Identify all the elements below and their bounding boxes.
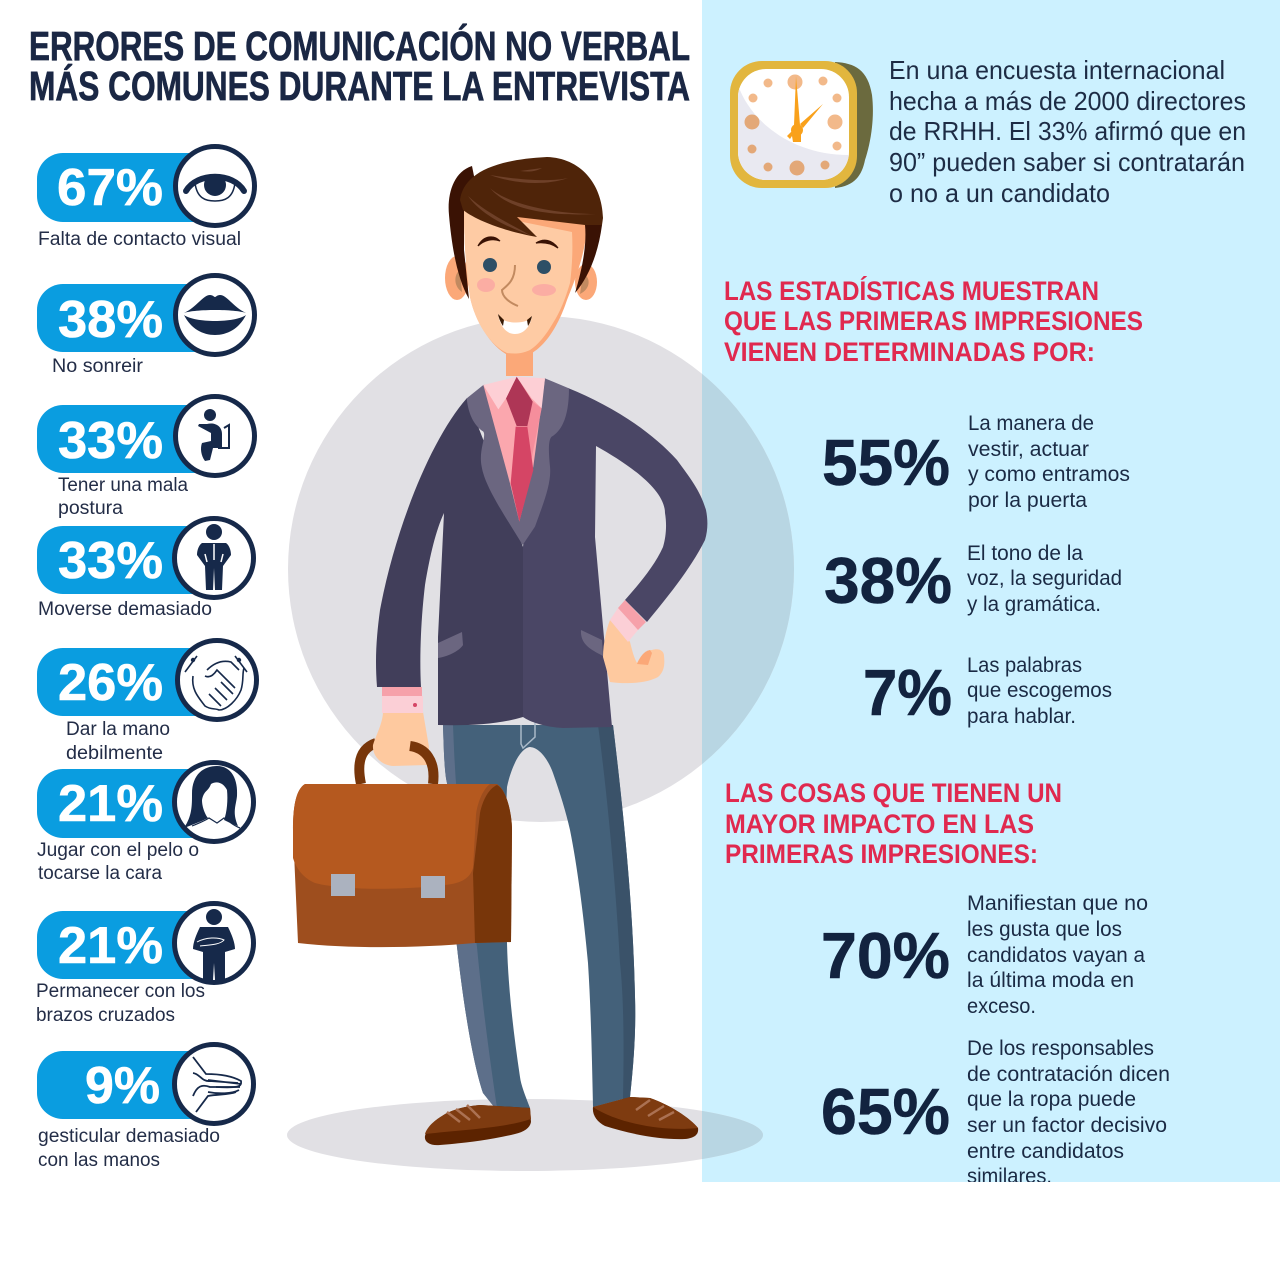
stat: 21% jugar con el pelo: 21% [58, 775, 163, 833]
intro text: de RRHH. El 33% afirmó que en [889, 116, 1246, 146]
stat: 70%: Manifiestan que no [967, 891, 1148, 915]
heading: mayor impacto: MAYOR IMPACTO EN LAS [725, 809, 1034, 839]
heading: primeras impresiones: LAS ESTADÍSTICAS MUESTRAN [724, 276, 1099, 306]
stat: 9% gesticular demasiado: gesticular demasiado [38, 1126, 220, 1147]
stat: 21% brazos cruzados: Permanecer con los [36, 981, 205, 1002]
stat: 70% [821, 891, 1148, 1018]
stat: 21% jugar con el pelo [37, 762, 254, 884]
stat: 26% dar la mano debilmente: debilmente [66, 743, 163, 764]
stat: 21% jugar con el pelo: tocarse la cara [38, 863, 162, 884]
heading: mayor impacto: LAS COSAS QUE TIENEN UN [725, 778, 1062, 808]
stat: 38% no sonreir: 38% [58, 291, 163, 349]
stat: 65%: ser un factor decisivo [967, 1113, 1167, 1137]
icon: seated person [176, 396, 254, 476]
stat: 33% moverse demasiado [37, 518, 254, 620]
stat: 67% falta de contacto visual: 67% [57, 159, 163, 217]
stat: 70%: la última moda en [967, 968, 1134, 992]
stat: 55% [822, 411, 1130, 512]
stat: 9% gesticular demasiado: con las manos [38, 1150, 160, 1171]
stat: 67% falta de contacto visual [37, 146, 254, 250]
stat: 65%: de contratación dicen [967, 1062, 1170, 1086]
stat: 55%: y como entramos [968, 462, 1130, 486]
stat: 33% mala postura [37, 396, 254, 519]
stat: 33% moverse demasiado: Moverse demasiado [38, 599, 212, 620]
icon: eye [176, 146, 254, 226]
panel: right blue background [702, 0, 1280, 1182]
stat: 55%: La manera de [968, 411, 1094, 435]
intro text [889, 55, 1246, 208]
stat: 38% no sonreir [37, 276, 254, 377]
hair [449, 157, 603, 299]
right shoe [593, 1097, 698, 1139]
icon: gesturing hand [174, 1044, 254, 1124]
stat: 65%: que la ropa puede [967, 1087, 1136, 1111]
jacket [376, 388, 707, 728]
stat: 26% dar la mano debilmente: Dar la mano [66, 719, 170, 740]
stat: 55%: vestir, actuar [968, 437, 1089, 461]
stat: 7% [863, 653, 1112, 729]
intro text: 90” pueden saber si contratarán [889, 147, 1245, 177]
stat: 38%: y la gramática. [967, 592, 1101, 616]
stat: 65%: similares. [967, 1164, 1052, 1188]
stat: 70%: les gusta que los [967, 917, 1122, 941]
stat: 21% brazos cruzados [36, 904, 254, 1026]
left shoe [425, 1105, 531, 1145]
left hand and cuff [373, 687, 433, 784]
neck and ears [445, 256, 597, 376]
stat: 70%: candidatos vayan a [967, 943, 1145, 967]
icon: person with crossed arms [174, 904, 254, 982]
stat: 67% falta de contacto visual: Falta de contacto visual [38, 229, 241, 250]
illustration: businessman with briefcase [293, 157, 707, 1145]
title: ERRORES DE COMUNICACIÓN NO VERBAL [29, 23, 690, 69]
intro text: En una encuesta internacional [889, 55, 1225, 85]
title: MÁS COMUNES DURANTE LA ENTREVISTA [29, 63, 690, 109]
stat: 33% moverse demasiado: 33% [58, 532, 163, 590]
stat: 65%: entre candidatos [967, 1139, 1124, 1163]
stat: 26% dar la mano debilmente [37, 640, 256, 764]
stat: 65%: 65% [821, 1075, 950, 1148]
stat: 9% gesticular demasiado [37, 1044, 254, 1171]
stat: 38% [824, 541, 1122, 617]
heading: primeras impresiones [724, 276, 1143, 367]
face [464, 210, 587, 358]
stat: 26% dar la mano debilmente: 26% [58, 654, 163, 712]
briefcase [293, 784, 512, 947]
icon: handshake [178, 640, 256, 720]
stat: 70%: 70% [821, 919, 950, 992]
stat: 55%: 55% [822, 426, 950, 499]
heading: mayor impacto [725, 778, 1062, 869]
icon: standing man [174, 518, 254, 598]
stat: 7%: 7% [863, 656, 952, 729]
stat: 38%: El tono de la [967, 541, 1083, 565]
stat: 55%: por la puerta [968, 488, 1087, 512]
title [29, 23, 690, 109]
intro text: hecha a más de 2000 directores [889, 86, 1246, 116]
stat: 70%: exceso. [967, 994, 1036, 1018]
left handle part [359, 743, 376, 784]
right hand and cuff [603, 600, 664, 683]
stat: 33% mala postura: Tener una mala [58, 475, 188, 496]
stat: 7%: Las palabras [967, 653, 1082, 677]
heading: primeras impresiones: VIENEN DETERMINADAS POR: [724, 337, 1095, 367]
trousers [443, 712, 635, 1108]
stat: 21% brazos cruzados: 21% [58, 917, 163, 975]
stat: 21% brazos cruzados: brazos cruzados [36, 1005, 175, 1026]
heading: primeras impresiones: QUE LAS PRIMERAS IMPRESIONES [724, 306, 1143, 336]
stat: 9% gesticular demasiado: 9% [85, 1057, 160, 1115]
stat: 65% [821, 1036, 1170, 1188]
intro text: o no a un candidato [889, 178, 1110, 208]
stat: 65%: De los responsables [967, 1036, 1154, 1060]
stat: 7%: para hablar. [967, 704, 1076, 728]
shirt, tie, collar and lapels [467, 377, 569, 545]
stat: 21% jugar con el pelo: Jugar con el pelo o [37, 840, 199, 861]
icon: lips [176, 276, 254, 354]
stat: 38% no sonreir: No sonreir [52, 356, 144, 377]
background: grey circle and floor shadow [287, 316, 794, 1171]
stat: 33% mala postura: postura [58, 498, 123, 519]
stat: 38%: voz, la seguridad [967, 566, 1122, 590]
heading: mayor impacto: PRIMERAS IMPRESIONES: [725, 839, 1038, 869]
stat: 33% mala postura: 33% [58, 412, 163, 470]
icon: woman with long hair [174, 762, 254, 842]
icon: clock [730, 61, 873, 188]
stat: 38%: 38% [824, 544, 952, 617]
stat: 7%: que escogemos [967, 678, 1112, 702]
